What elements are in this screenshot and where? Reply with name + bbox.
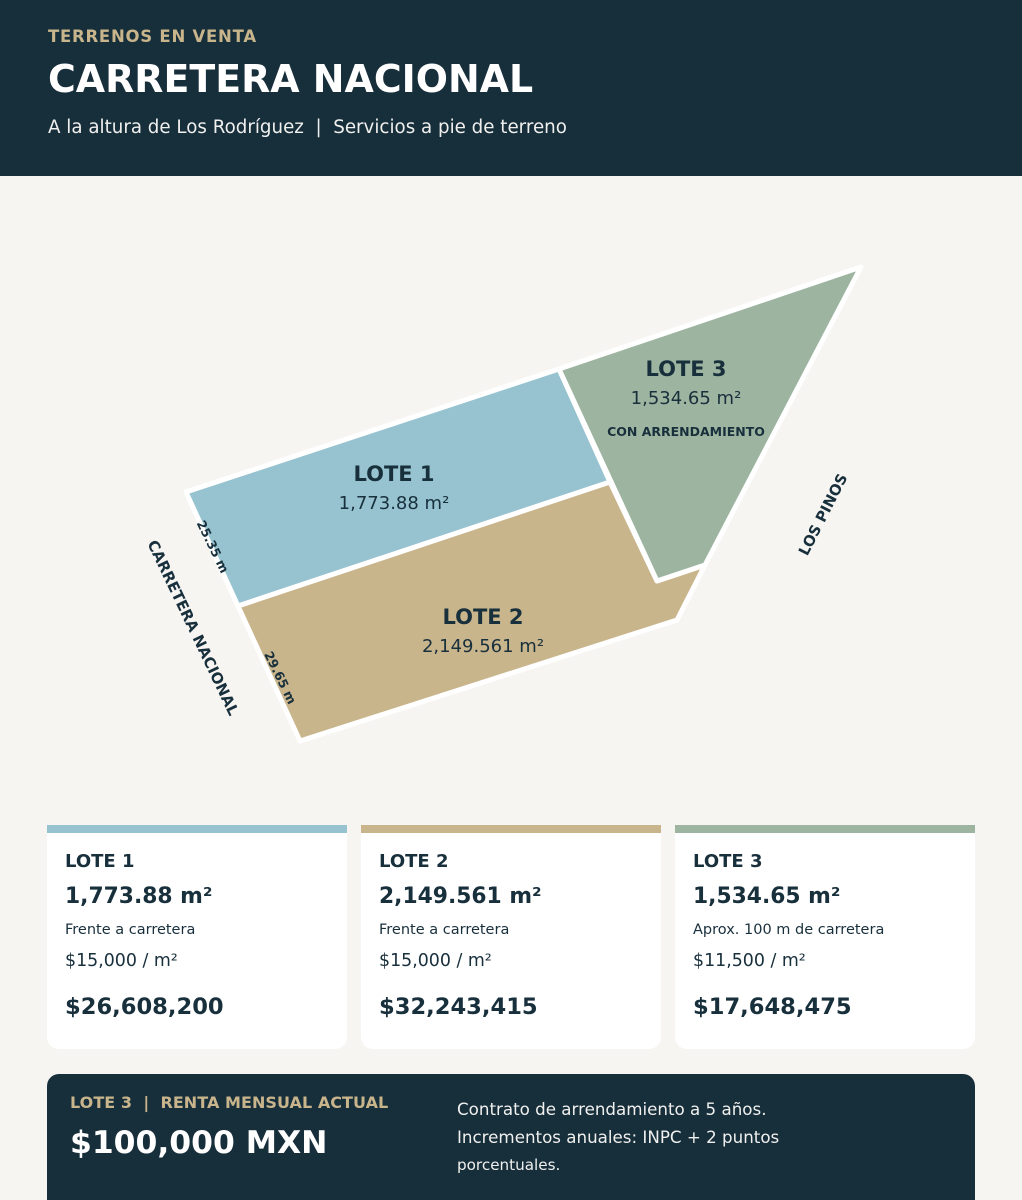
road label: los pinos: LOS PINOS: [796, 471, 851, 558]
lote 3 parcel: [559, 267, 861, 581]
lote 3 parcel: 1,534.65 m²: [631, 388, 741, 409]
card: lote 3: $11,500 / m²: [693, 951, 806, 971]
contract text: Contrato de arrendamiento a 5 años.: [457, 1099, 766, 1119]
lote 2 parcel: [238, 482, 705, 741]
lote 1 parcel: 1,773.88 m²: [339, 493, 449, 514]
rent amount: $100,000 MXN: [70, 1125, 327, 1161]
card: lote 2: LOTE 2: [379, 851, 448, 872]
eyebrow: terrenos en venta: TERRENOS EN VENTA: [48, 27, 257, 46]
lote 2 parcel: 2,149.561 m²: [422, 636, 544, 657]
lote 2 parcel: LOTE 2: [442, 605, 524, 629]
header band: [0, 0, 1022, 176]
card: lote 1: Frente a carretera: [65, 922, 195, 938]
card: lote 1: 1,773.88 m²: [65, 884, 212, 909]
card: lote 2: $32,243,415: [379, 994, 538, 1020]
title: CARRETERA NACIONAL: [48, 57, 533, 101]
lote 3 parcel: LOTE 3: [645, 357, 727, 381]
card: lote 2: [361, 825, 661, 1049]
contract text: porcentuales.: [457, 1156, 560, 1174]
card: lote 1: [47, 825, 347, 1049]
card: lote 2: 2,149.561 m²: [379, 884, 542, 909]
rent banner: [47, 1074, 975, 1200]
contract text: [457, 1099, 779, 1174]
lote 3 parcel: CON ARRENDAMIENTO: [607, 424, 765, 439]
card: lote 3: [675, 825, 975, 1049]
card: lote 3: LOTE 3: [693, 851, 762, 872]
card: lote 2: Frente a carretera: [379, 922, 509, 938]
rent label: LOTE 3 | RENTA MENSUAL ACTUAL: [70, 1093, 388, 1112]
lote 2 parcel: 29.65 m: [261, 649, 300, 706]
road label: carretera nacional: CARRETERA NACIONAL: [143, 537, 243, 719]
card: lote 3: Aprox. 100 m de carretera: [693, 922, 884, 938]
contract text: Incrementos anuales: INPC + 2 puntos: [457, 1127, 779, 1147]
site plan map: [143, 264, 864, 744]
lote 1 parcel: 25.35 m: [194, 518, 232, 575]
card: lote 1: LOTE 1: [65, 851, 134, 872]
card: lote 3: 1,534.65 m²: [693, 884, 840, 909]
lote 1 parcel: [186, 369, 610, 606]
subtitle: A la altura de Los Rodríguez | Servicios a pie de terreno: [48, 117, 567, 138]
card: lote 1: $15,000 / m²: [65, 951, 178, 971]
card: lote 3: $17,648,475: [693, 994, 852, 1020]
card: lote 1: $26,608,200: [65, 994, 224, 1020]
card: lote 2: $15,000 / m²: [379, 951, 492, 971]
lote 1 parcel: LOTE 1: [353, 462, 435, 486]
